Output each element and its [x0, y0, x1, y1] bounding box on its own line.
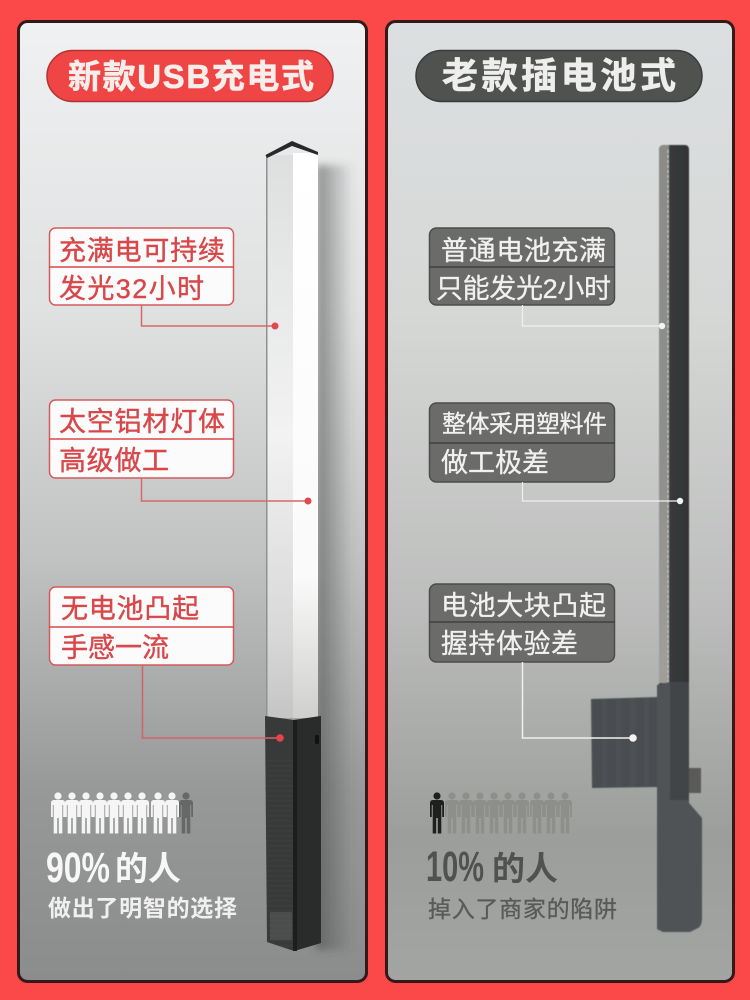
leader line 2: [142, 478, 312, 504]
heading: old battery type: [416, 50, 702, 102]
callout: big battery bulge: 握持体验差: [441, 629, 578, 659]
leader line 3: [522, 662, 637, 742]
callout: plastic parts: [429, 403, 615, 482]
stat: 10 percent: 10%: [426, 843, 484, 891]
icon row: 9 of 10 people highlighted: [51, 792, 193, 834]
callout: no battery bulge: 手感一流: [61, 633, 169, 663]
callout: only 2 hours of light: [429, 228, 615, 305]
stat: 10 percent: [426, 843, 558, 891]
callout: aluminum body: 太空铝材灯体: [59, 407, 225, 437]
heading: new USB rechargeable: [47, 50, 333, 102]
callout: plastic parts: 做工极差: [441, 448, 549, 478]
callout: 32 hours of light: 充满电可持续: [59, 236, 225, 266]
callout: no battery bulge: 无电池凸起: [61, 594, 199, 624]
callout: only 2 hours of light: 普通电池充满: [441, 236, 606, 266]
callout: 32 hours of light: 发光32小时: [59, 274, 204, 304]
stat: 10 percent: 的人: [492, 850, 558, 887]
heading: new USB rechargeable: 新款USB充电式: [68, 58, 314, 95]
battery block: [591, 697, 658, 788]
stat: 90 percent: 的人: [115, 850, 181, 887]
callout: plastic parts: 整体采用塑料件: [442, 411, 607, 438]
caption: fell into the merchant's trap: 掉入了商家的陷阱: [428, 896, 617, 922]
callout: 32 hours of light: [49, 228, 234, 305]
callout: no battery bulge: [49, 587, 234, 665]
callout: aluminum body: 高级做工: [59, 446, 169, 476]
panel: old battery type: [386, 22, 734, 982]
icon row: 1 of 10 people highlighted: [430, 792, 572, 834]
callout: big battery bulge: 电池大块凸起: [441, 591, 606, 621]
stat: 90 percent: [46, 844, 181, 892]
handle: [657, 682, 702, 932]
callout: only 2 hours of light: 只能发光2小时: [436, 274, 611, 304]
product: white USB light wand: [265, 141, 354, 951]
leader line 2: [522, 482, 683, 504]
heading: old battery type: 老款插电池式: [442, 55, 676, 96]
caption: made a wise choice: 做出了明智的选择: [48, 895, 237, 921]
product: dark battery light wand: [591, 145, 702, 932]
leader line 1: [522, 305, 665, 329]
panel: new USB rechargeable: [18, 22, 366, 982]
leader line 3: [142, 665, 284, 742]
callout: aluminum body: [49, 400, 234, 478]
stat: 90 percent: 90%: [46, 844, 110, 892]
callout: big battery bulge: [429, 584, 615, 662]
leader line 1: [142, 305, 278, 330]
